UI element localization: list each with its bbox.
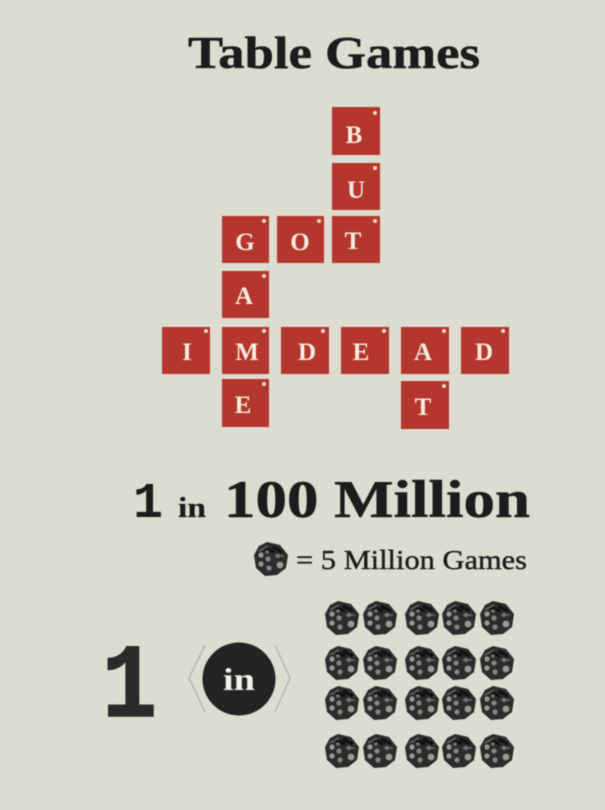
tile: O: O [290, 229, 310, 256]
tile: I [162, 327, 210, 374]
crossword tiles [162, 107, 509, 429]
tile: D [281, 327, 329, 374]
tile: O [277, 216, 324, 263]
tile: A [401, 327, 449, 374]
tile: G [222, 216, 269, 263]
tile: A: A [235, 283, 253, 310]
tile: T: T [345, 228, 362, 255]
tile: D [461, 327, 509, 374]
icon: die [254, 542, 288, 576]
tile: E [222, 379, 269, 427]
tile: U [332, 163, 380, 210]
heading: 1 in 100 Million [133, 471, 530, 533]
tile: E: E [353, 339, 369, 366]
legend: die equals 5 million games [254, 542, 527, 576]
tile: M: M [235, 339, 259, 366]
tile: T [401, 381, 449, 429]
badge: in [189, 642, 290, 716]
tile: B: B [346, 122, 362, 149]
tile: D: D [475, 339, 493, 366]
heading: 1 in 100 Million: 1 [133, 476, 163, 533]
tile: A: A [414, 339, 432, 366]
tile: E: E [235, 392, 251, 419]
tile: A [222, 271, 269, 318]
tile: T [332, 216, 380, 263]
badge: in: in [223, 661, 255, 697]
legend text: = 5 Million Games [296, 545, 527, 575]
dice grid: 20 dice [325, 601, 514, 768]
tile: G: G [235, 229, 255, 256]
tile: I: I [182, 339, 192, 366]
tile: E [341, 327, 389, 374]
big numeral 1: 1 [102, 629, 157, 748]
title: Table Games [188, 27, 480, 78]
tile: B [332, 107, 380, 155]
tile: M [222, 327, 269, 374]
heading: 1 in 100 Million: in [178, 492, 206, 524]
tile: D: D [298, 339, 316, 366]
tile: T: T [415, 394, 432, 421]
tile: U: U [347, 177, 365, 204]
heading: 1 in 100 Million: 100 Million [224, 471, 530, 529]
